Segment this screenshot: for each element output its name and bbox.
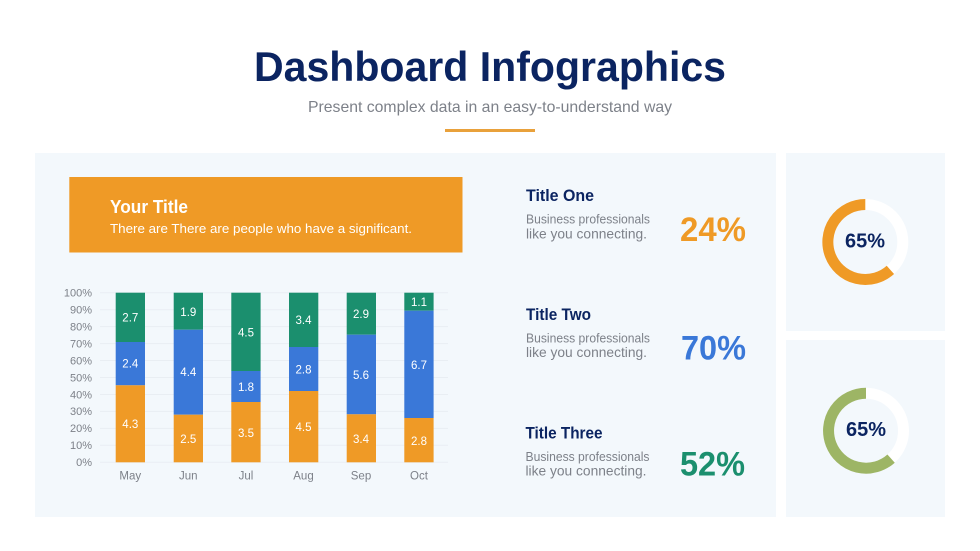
bars: Jun	[174, 293, 203, 482]
bars: Oct: 1.1	[411, 297, 427, 309]
value: 70%: 70%	[681, 330, 746, 368]
bars: Sep: 5.6	[353, 370, 369, 382]
bars: Jul: Jul	[239, 470, 253, 482]
stat: Title Three	[526, 425, 745, 484]
y axis labels	[64, 288, 92, 469]
stat: Title Three: Business professionals	[526, 450, 650, 464]
panel: green donut	[786, 340, 945, 517]
y axis labels: 60%	[70, 355, 92, 367]
bars: Aug: 2.8	[296, 364, 312, 376]
stat: Title Two: like you connecting.	[526, 345, 647, 360]
bars: Jun: 1.9	[180, 307, 196, 319]
stacked bar chart	[64, 288, 448, 482]
stat: Title One: like you connecting.	[526, 226, 647, 241]
y axis labels: 40%	[70, 389, 92, 401]
bars: May: May	[119, 470, 141, 482]
bars: Jul: 3.5	[238, 428, 254, 440]
y axis labels: 70%	[70, 338, 92, 350]
y axis labels: 0%	[76, 457, 92, 469]
bars: Oct: 2.8	[411, 436, 427, 448]
bars: Oct: 6.7	[411, 360, 427, 372]
bars: Aug: 4.5	[296, 422, 312, 434]
bars: Jul	[231, 293, 261, 482]
donut value: 65%	[846, 419, 886, 441]
bars: May: 2.4	[122, 358, 139, 370]
stat: Title Two	[526, 306, 746, 368]
y axis labels: 100%	[64, 288, 92, 300]
bars: May	[116, 293, 145, 482]
title underline	[445, 129, 535, 132]
value: 24%: 24%	[680, 211, 746, 249]
bars: Jul: 4.5	[238, 328, 254, 340]
title: Dashboard Infographics	[254, 43, 726, 90]
y axis labels: 50%	[70, 372, 92, 384]
bars: Sep	[347, 293, 376, 482]
bars: Jul: 1.8	[238, 382, 254, 394]
stat: Title Three: like you connecting.	[526, 464, 646, 479]
stat: Title One: Title One	[526, 187, 594, 205]
banner	[69, 177, 463, 252]
bars: May: 2.7	[122, 312, 138, 324]
panel: orange donut	[786, 153, 945, 331]
bars: Jun: 2.5	[180, 434, 196, 446]
bars: Oct	[404, 293, 434, 482]
bars: Aug: 3.4	[296, 315, 312, 327]
y axis labels: 80%	[70, 321, 92, 333]
stat: Title Two: Title Two	[526, 306, 591, 324]
y axis labels: 90%	[70, 304, 92, 316]
bars: Aug	[289, 293, 318, 482]
panel: main	[35, 153, 776, 517]
value: 52%: 52%	[680, 446, 745, 484]
y axis labels: 20%	[70, 423, 92, 435]
subtitle: Present complex data in an easy-to-understand way	[308, 99, 672, 116]
bars: May: 4.3	[122, 419, 138, 431]
stat: Title One: Business professionals	[526, 213, 650, 227]
bars: Aug: Aug	[293, 470, 314, 482]
bars: Sep: Sep	[351, 470, 371, 482]
y axis labels: 10%	[70, 440, 92, 452]
bars: Sep: 3.4	[353, 434, 370, 446]
bars: Jun: 4.4	[180, 367, 197, 379]
banner text: There are There are people who have a significant.	[110, 221, 412, 236]
bars: Sep: 2.9	[353, 309, 369, 321]
stat: Title One	[526, 187, 746, 249]
stat: Title Two: Business professionals	[526, 331, 650, 345]
y axis labels: 30%	[70, 406, 92, 418]
donut value: 65%	[845, 231, 885, 253]
bars: Jun: Jun	[179, 470, 198, 482]
bars: Oct: Oct	[410, 470, 429, 482]
banner heading: Your Title	[110, 197, 188, 217]
stat: Title Three: Title Three	[526, 425, 602, 443]
